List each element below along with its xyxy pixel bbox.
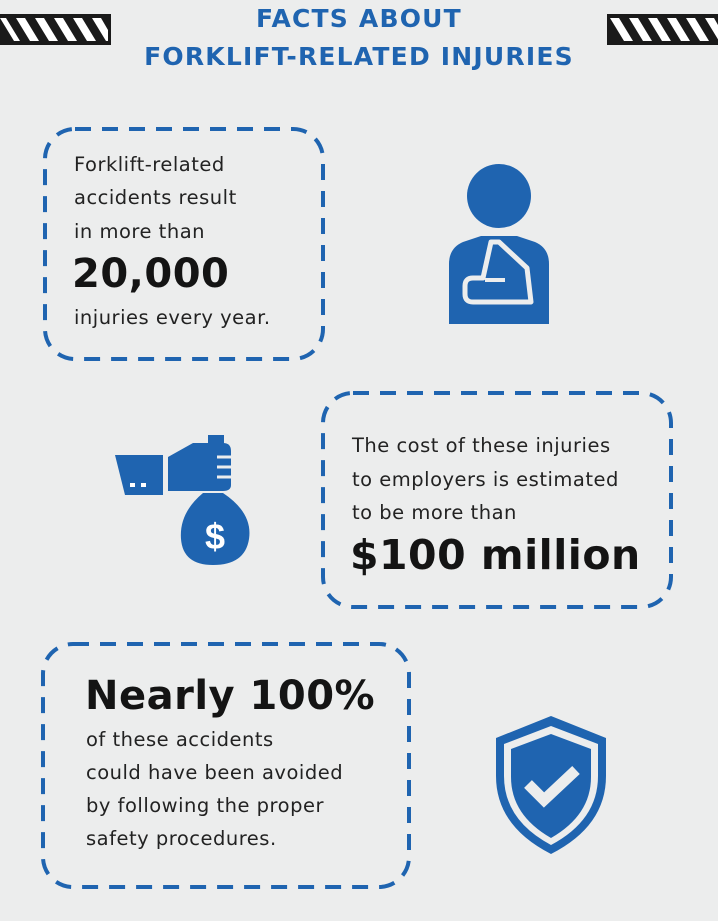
panel: cost: to employers is estimated: [352, 468, 619, 491]
panel: cost: The cost of these injuries: [352, 434, 611, 457]
panel: cost: [321, 391, 673, 609]
stat: Nearly 100%: Nearly 100%: [85, 673, 375, 719]
panel: injuries: in more than: [74, 220, 205, 243]
panel: avoidable: by following the proper: [86, 794, 324, 817]
stripe bar left: [0, 14, 111, 45]
panel: injuries: Forklift-related: [74, 153, 225, 176]
panel: avoidable: could have been avoided: [86, 761, 343, 784]
panel: avoidable: safety procedures.: [86, 827, 277, 850]
panel: avoidable: of these accidents: [86, 728, 274, 751]
stripe bar right: [607, 14, 718, 45]
icon: hand with money bag: $: [205, 516, 225, 557]
icon: injured person: [449, 164, 549, 324]
icon: hand with money bag: [115, 435, 250, 565]
stat: $100 million: $100 million: [350, 531, 641, 579]
panel: injuries: injuries every year.: [74, 306, 271, 329]
title: FACTS ABOUT: [256, 4, 462, 33]
title: FORKLIFT-RELATED INJURIES: [144, 42, 574, 71]
panel: injuries: [43, 127, 325, 361]
title: [144, 4, 574, 71]
stat: 20,000: 20,000: [72, 251, 229, 297]
icon: shield check: [496, 716, 606, 854]
panel: cost: to be more than: [352, 501, 517, 524]
panel: injuries: accidents result: [74, 186, 237, 209]
panel: avoidable: [41, 642, 411, 889]
